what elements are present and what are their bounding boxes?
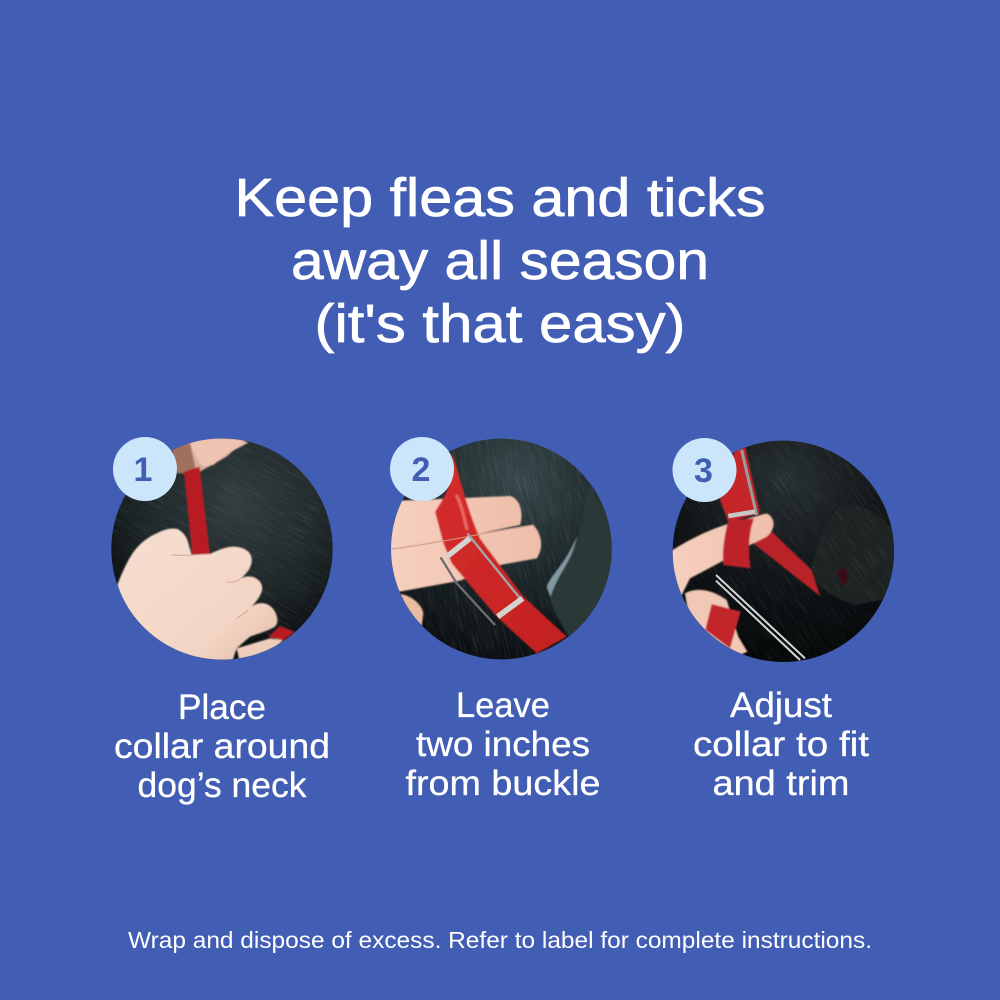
step 1 caption: Place [178,688,266,727]
panel: step 3 photo and badge [672,438,894,662]
panel: step 1 photo and badge [111,437,333,660]
photo: scissors trimming collar [672,440,894,662]
badge: number 2: 2 [412,451,430,489]
title: away all season [291,231,709,291]
panel: step 2 photo and badge [390,437,612,660]
badge: number 3: 3 [694,452,713,490]
step 3 caption: collar to fit [693,725,869,764]
step 1 caption: dog’s neck [138,766,307,805]
badge: number 3 [672,438,736,502]
step 2 caption: from buckle [406,764,600,803]
badge: number 1: 1 [134,451,152,489]
photo: two fingers under collar [391,438,612,660]
title [234,168,766,354]
photo: hand placing collar on dog's neck [111,438,333,660]
step 2 caption: two inches [416,725,590,764]
step 2 caption [406,686,600,803]
step 3 caption: Adjust [730,686,832,725]
badge: number 2 [390,437,454,501]
title: (it's that easy) [314,294,686,354]
step 3 caption [693,686,869,803]
step 2 caption: Leave [456,686,550,725]
footnote: Wrap and dispose of excess. Refer to label for complete instructions. [128,927,872,953]
step 3 caption: and trim [712,764,850,803]
step 1 caption [114,688,330,805]
badge: number 1 [113,437,177,501]
title: Keep fleas and ticks [234,168,766,228]
step 1 caption: collar around [114,727,330,766]
